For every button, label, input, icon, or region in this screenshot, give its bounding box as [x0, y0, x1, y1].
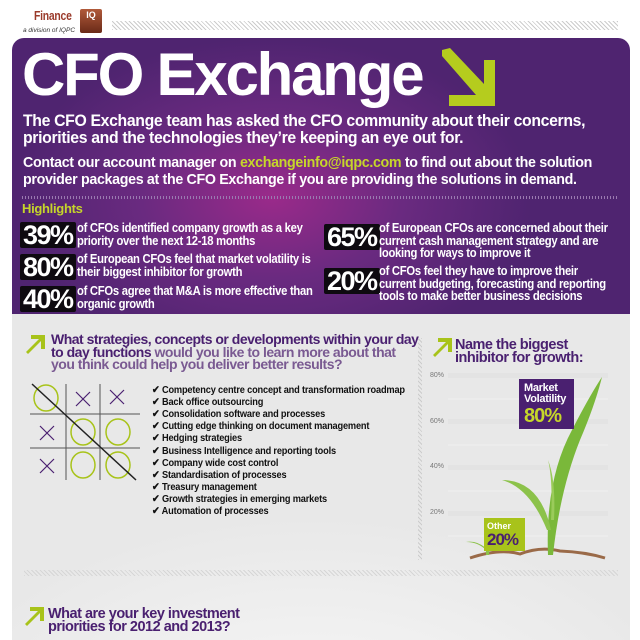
heading text: What are your key investment: [48, 606, 240, 622]
stat 39%: priority over the next 12-18 months: [77, 234, 255, 248]
heading text: priorities for 2012 and 2013?: [48, 619, 230, 635]
stat 20%: current budgeting, forecasting and reporting: [379, 276, 606, 290]
heading text: [455, 337, 583, 366]
contact text: provider packages at the CFO Exchange if you are providing the solutions in demand.: [23, 171, 577, 188]
chart: inhibitor for growth: [430, 372, 606, 560]
chart: inhibitor for growth: 40%: [430, 463, 444, 470]
checklist: ✔ Back office outsourcing: [152, 396, 263, 408]
heading text: inhibitor for growth:: [455, 350, 583, 366]
logo box: IQ: [80, 9, 102, 33]
intro text: priorities and the technologies they’re keeping an eye out for.: [23, 129, 463, 147]
logo box: IQ: IQ: [86, 10, 96, 20]
checklist: ✔ Cutting edge thinking on document management: [152, 420, 369, 432]
checklist: ✔ Treasury management: [152, 481, 257, 493]
callout: Market Volatility 80%: [519, 379, 574, 429]
intro text: The CFO Exchange team has asked the CFO community about their concerns,: [23, 112, 585, 130]
heading text: Name the biggest: [455, 337, 568, 353]
stat 20%: 20%: [327, 266, 377, 296]
stat 39%: [20, 220, 303, 250]
arrow icon: [25, 607, 44, 626]
arrow icon: [26, 335, 45, 354]
checklist: ✔ Growth strategies in emerging markets: [152, 493, 327, 505]
purple hero panel: [12, 38, 630, 314]
stat 80%: [20, 252, 311, 282]
stat 65%: [324, 221, 608, 260]
illustration: plant: [466, 377, 606, 560]
logo text: Finance: Finance: [34, 8, 72, 23]
icon: tic tac toe: [30, 384, 140, 480]
section: strategies question: [26, 331, 419, 372]
axis labels: 80%: [430, 372, 444, 379]
checklist: ✔ Hedging strategies: [152, 432, 242, 444]
stat 40%: organic growth: [77, 296, 154, 310]
arrow icon: lime down-right: [442, 48, 495, 106]
contact text: [23, 154, 592, 188]
checklist: ✔ Business Intelligence and reporting tools: [152, 445, 336, 457]
question text: What strategies, concepts or developments within your day to day functions would you like to learn more about that you think could help you deliver better results?: [51, 331, 418, 372]
highlights heading: Highlights: [22, 201, 83, 216]
checklist: ✔ Standardisation of processes: [152, 469, 286, 481]
stat 65%: 65%: [327, 222, 377, 252]
heading text: [48, 606, 240, 635]
callout: Market Volatility 80%: Market: [524, 382, 558, 394]
section: inhibitor heading: [433, 337, 583, 366]
arrow icon: [433, 338, 452, 357]
logo subtitle: a division of IQPC: [23, 27, 75, 34]
stat 20%: [324, 264, 606, 303]
chart: inhibitor for growth: 20%: [430, 509, 444, 516]
stat 80%: of European CFOs feel that market volatility is: [77, 252, 311, 266]
stat 39%: of CFOs identified company growth as a key: [77, 221, 303, 235]
stat 20%: tools to make better business decisions: [379, 289, 582, 303]
stat 65%: looking for ways to improve it: [379, 246, 530, 260]
stat 80%: their biggest inhibitor for growth: [77, 264, 242, 278]
callout: Other 20%: 20%: [487, 530, 518, 549]
title: CFO Exchange: [22, 41, 422, 108]
section: investment priorities heading: [25, 606, 240, 635]
chart: inhibitor for growth: 60%: [430, 418, 444, 425]
gray lower panel: [12, 314, 630, 640]
stat 39%: 39%: [23, 220, 73, 250]
checklist: [152, 384, 405, 517]
checklist: ✔ Automation of processes: [152, 505, 268, 517]
checklist: ✔ Competency centre concept and transformation roadmap: [152, 384, 405, 396]
stat 65%: current cash management strategy and are: [379, 234, 598, 248]
intro text: [23, 112, 585, 147]
callout: Market Volatility 80%: Volatility: [524, 393, 566, 405]
checklist: ✔ Consolidation software and processes: [152, 408, 325, 420]
stat 80%: 80%: [23, 252, 73, 282]
stat 40%: [20, 284, 313, 314]
checklist: ✔ Company wide cost control: [152, 457, 278, 469]
callout: Other 20%: Other: [487, 521, 511, 531]
contact text: Contact our account manager on exchangeinfo@iqpc.com to find out about the solution: [23, 154, 592, 171]
stat 20%: of CFOs feel they have to improve their: [379, 264, 578, 278]
stat 65%: of European CFOs are concerned about their: [379, 221, 608, 235]
stat 40%: 40%: [23, 284, 73, 314]
callout: Other 20%: [484, 518, 525, 551]
stat 40%: of CFOs agree that M&A is more effective than: [77, 284, 313, 298]
header logo: [23, 8, 102, 34]
callout: Market Volatility 80%: 80%: [524, 405, 561, 427]
